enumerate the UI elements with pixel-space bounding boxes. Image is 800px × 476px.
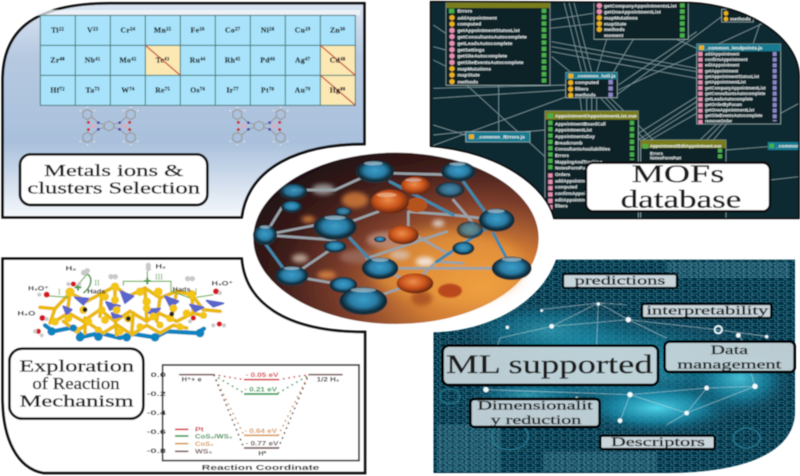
periodic table of metals: 74 — [129, 88, 135, 93]
periodic table of metals: Cd — [330, 55, 340, 64]
periodic table of metals: Re — [155, 85, 165, 94]
periodic table of metals: 45 — [235, 58, 241, 63]
y axis labels: -0.2 — [147, 391, 167, 398]
periodic table of metals: 75 — [165, 88, 170, 93]
database table: methods fragment — [722, 9, 753, 23]
database table: appointment list: ConsultantsAvailabilities — [555, 147, 611, 152]
energy value labels: - 0.77 eV — [246, 441, 278, 447]
database table: appointment list: Errors — [555, 153, 569, 158]
database table: edit appointment: NotesFormPart — [650, 155, 682, 160]
y axis labels: -0.6 — [147, 429, 167, 436]
database table: appointment settings: methods — [457, 79, 478, 85]
periodic table of metals: 48 — [340, 58, 346, 63]
label: exploration of reaction mechanism — [9, 349, 143, 419]
periodic table of metals: 78 — [269, 88, 275, 93]
database table: appointment settings: getLeadsAutocomplete — [457, 41, 513, 47]
database table: appointment settings — [446, 3, 550, 85]
periodic table of metals: Mo — [119, 55, 131, 64]
database table: common endpoints: getLeadsAutocomplete — [705, 96, 753, 101]
periodic table of metals: Pd — [260, 55, 270, 64]
chart legend: CoS₂/WS₂ — [195, 434, 233, 440]
panel: ML supported — [433, 258, 800, 475]
atom highlights — [260, 161, 522, 292]
database table: common fragment: _common — [775, 144, 800, 150]
periodic table of metals: Fe — [191, 25, 199, 34]
database table: common endpoints: getCompanyAppointmentList — [705, 85, 766, 90]
chart legend: WS₂ — [195, 450, 213, 456]
database table: appointment settings: getAppointmentStatusList — [457, 28, 520, 34]
database table: common endpoints: getAppointmentList — [705, 80, 746, 85]
label: MOFs database — [586, 160, 770, 213]
illustration: catalyst surface with hydrogen evolution steps: Hads — [173, 286, 191, 293]
periodic table of metals: 80 — [340, 88, 346, 93]
blurred background atoms — [292, 184, 444, 306]
periodic table of metals: Ta — [86, 85, 94, 94]
database table: appointment list: Orders — [555, 172, 571, 177]
database table: common endpoints: getAppointment — [705, 68, 739, 73]
periodic table of metals: 72 — [60, 88, 65, 93]
periodic table of metals: Cu — [295, 25, 305, 34]
periodic table of metals: 30 — [340, 28, 346, 33]
label: Dimensionality reduction: y reduction — [491, 413, 582, 427]
label: predictions: predictions — [575, 274, 665, 288]
y axis labels: 0.0 — [151, 372, 167, 379]
label: metals ions and clusters selection: Metals ions & — [44, 161, 183, 180]
periodic table of metals: Hg — [330, 85, 340, 94]
database table: common endpoints: getConsultantsAutocomplete — [705, 91, 766, 96]
database table: common endpoints: getOneAppointmentList — [705, 108, 755, 113]
database table: appointment list: MappingAndTracking — [555, 159, 602, 164]
label: Descriptors — [600, 435, 715, 449]
label: exploration of reaction mechanism: Mechanism — [20, 392, 134, 411]
periodic table of metals: 26 — [199, 28, 205, 33]
label: MOFs database: database — [621, 185, 741, 213]
database table: common util: methods — [575, 93, 596, 99]
periodic table of metals: Zr — [50, 55, 60, 64]
y axis labels — [147, 372, 167, 455]
database table: company appointments: moment — [604, 33, 624, 39]
illustration: catalyst surface with hydrogen evolution steps: H₂ — [155, 264, 166, 271]
label: metals ions and clusters selection — [20, 154, 207, 205]
energy value labels: 1/2 H₂ — [317, 377, 340, 383]
dotted energy pathways — [214, 375, 308, 448]
central illustration: MOF crystal structure — [249, 148, 543, 329]
database table: common endpoints: confirmAppointment — [705, 57, 748, 62]
periodic table of metals: 24 — [130, 28, 136, 33]
energy value labels: - 0.64 eV — [244, 429, 277, 435]
database table: appointment list: computed — [555, 185, 577, 190]
database table: common endpoints: getAppointmentStatusList — [705, 74, 760, 79]
database table: common endpoints: getOrderByParam — [705, 102, 742, 107]
database table: appointment settings: mapState — [457, 73, 480, 79]
database table: common endpoints: addAppointment — [705, 51, 740, 56]
label: metals ions and clusters selection: clusters Selection — [27, 179, 201, 198]
database table: common endpoints: editAppointment — [705, 63, 740, 68]
periodic table of metals: 25 — [166, 28, 172, 33]
panel: MOFs database — [430, 0, 800, 220]
illustration: catalyst surface with hydrogen evolution steps: H₃O⁺ — [28, 286, 49, 293]
label: exploration of reaction mechanism: Exploration — [19, 356, 135, 375]
periodic table of metals: Tc — [156, 55, 164, 64]
illustration: catalyst surface with hydrogen evolution steps: II — [94, 278, 100, 287]
label: Data management — [665, 342, 795, 372]
periodic table of metals: 47 — [305, 58, 311, 63]
database table: company appointments: mapMutations — [604, 15, 638, 21]
database table: appointment settings: getConsultantsAutocomplete — [457, 34, 527, 40]
periodic table of metals: Ni — [261, 25, 269, 34]
database table: common fragment — [768, 142, 800, 150]
illustration: catalyst surface with hydrogen evolution steps: III — [155, 272, 163, 281]
periodic table of metals: W — [121, 85, 129, 94]
periodic table of metals: 44 — [200, 58, 206, 63]
database table: edit appointment: Errors — [650, 151, 664, 156]
label: Data management: Data — [711, 343, 749, 357]
chart legend: Pt — [195, 428, 204, 434]
label: predictions — [563, 274, 677, 288]
periodic table of metals: Mn — [154, 25, 166, 34]
database table: common errors: _common_/Errors.js — [476, 135, 525, 141]
periodic table of metals: 23 — [93, 28, 99, 33]
database table: appointment settings: getSiteAutocomplete — [457, 54, 507, 60]
database table: common endpoints — [697, 44, 781, 124]
database table: methods fragment: methods — [730, 17, 751, 23]
periodic table of metals: 27 — [235, 28, 241, 33]
periodic table of metals: Ti — [51, 25, 59, 34]
blue linker atoms — [253, 160, 532, 315]
database table: edit appointment — [641, 140, 726, 220]
energy value labels: H* — [258, 452, 267, 458]
energy level lines — [179, 375, 343, 448]
icon: left metal complex molecule — [79, 106, 139, 146]
database table: appointment settings: getSiteEventsAutocomplete — [457, 60, 524, 66]
periodic table of metals: 76 — [200, 88, 205, 93]
illustration: catalyst surface with hydrogen evolution steps: Hads — [87, 288, 106, 295]
label: exploration of reaction mechanism: of Reaction — [32, 374, 120, 393]
illustration: catalyst surface with hydrogen evolution steps: H₃O⁺ — [212, 280, 234, 287]
periodic table of metals: Ru — [190, 55, 200, 64]
periodic table of metals: Au — [295, 85, 305, 94]
label: Data management: management — [677, 358, 782, 372]
database table: appointment list: editAppointment — [555, 197, 592, 202]
database table: appointment list: confirmAppointment — [555, 191, 601, 196]
periodic table of metals: Hf — [50, 85, 60, 94]
orange metal atoms — [371, 177, 462, 298]
database table: appointment list: AppointmentBoardCall — [555, 121, 606, 126]
database table: common util: _common_/util.js — [574, 74, 616, 80]
database table: common endpoints: _common_/endpoints.js — [704, 46, 763, 52]
panel: metal ions and clusters selection — [3, 3, 364, 217]
database table: edit appointment: Appointment/EditAppointment.vue — [650, 143, 722, 148]
label: interpretability — [642, 304, 771, 318]
periodic table of metals: Cr — [121, 25, 130, 34]
label: MOFs database: MOFs — [632, 160, 724, 188]
label: Descriptors: Descriptors — [611, 435, 705, 449]
periodic table of metals: Rh — [225, 55, 235, 64]
illustration: catalyst surface with hydrogen evolution steps: I — [195, 287, 198, 296]
periodic table of metals: Ir — [226, 85, 234, 94]
periodic table of metals: 22 — [59, 28, 65, 33]
chart legend — [175, 428, 233, 456]
energy value labels: H⁺+ e — [182, 376, 203, 383]
periodic table of metals: V — [87, 25, 93, 34]
chart: reaction free energy diagram — [147, 365, 359, 472]
database table: appointment list: Breadcrumb — [555, 140, 583, 145]
database table: company appointments: mapState — [604, 21, 627, 27]
label: Dimensionality reduction — [470, 398, 600, 427]
periodic table of metals: 73 — [94, 88, 100, 93]
database table: appointment list: addAppointment — [555, 178, 592, 183]
illustration: catalyst surface with hydrogen evolution steps: H₂ — [66, 266, 76, 273]
database table: appointment list — [545, 111, 638, 218]
periodic table of metals: Zn — [330, 25, 340, 34]
chart legend: CoS₂ — [195, 442, 214, 448]
energy value labels — [182, 373, 340, 458]
icon: right metal complex molecule — [229, 106, 289, 146]
y axis labels: -0.8 — [147, 448, 167, 455]
database table: appointment settings: getSettings — [457, 47, 485, 53]
label: ML supported — [443, 346, 658, 385]
database table: appointment list: AppointmentList — [555, 128, 592, 133]
periodic table of metals: 77 — [234, 88, 239, 93]
periodic table of metals: Pt — [261, 85, 269, 94]
bonds — [265, 172, 512, 301]
x axis title: Reaction Coordinate — [202, 465, 320, 472]
database table: company appointments — [594, 1, 688, 39]
database table: common util: computed — [575, 80, 599, 86]
database table: company appointments: methods — [604, 27, 625, 33]
database table: common util — [566, 72, 617, 99]
panel: exploration of reaction mechanism — [3, 259, 365, 473]
database table: company appointments: getOneAppointmentList — [604, 9, 661, 15]
database table: appointment list: filters — [555, 204, 568, 209]
periodic table of metals: 79 — [305, 88, 311, 93]
y axis labels: -0.4 — [147, 410, 167, 417]
database table: appointment settings: Errors — [457, 8, 473, 14]
database table: appointment list: Appointment/AppointmentList.vue — [555, 113, 637, 119]
periodic table of metals: 40 — [60, 58, 65, 63]
periodic table of metals: 29 — [305, 28, 311, 33]
periodic table of metals: 42 — [131, 58, 137, 63]
illustration: catalyst surface with hydrogen evolution steps: H₂O — [17, 310, 35, 317]
periodic table of metals: 41 — [95, 58, 101, 63]
label: ML supported: ML supported — [446, 350, 653, 379]
periodic table of metals: 28 — [269, 28, 275, 33]
database table: company appointments: getCompanyAppointmentsList — [604, 3, 677, 9]
database table: appointment list: AppointmentsDay — [555, 134, 595, 139]
periodic table of metals: 43 — [164, 58, 170, 63]
illustration: catalyst surface with hydrogen evolution steps — [17, 263, 234, 342]
periodic table of metals: Co — [225, 25, 235, 34]
database table: appointment settings: computed — [457, 22, 481, 28]
periodic table of metals: Ag — [295, 55, 305, 64]
periodic table of metals: Nb — [85, 55, 95, 64]
periodic table of metals — [40, 15, 355, 105]
database table: appointment settings: mapMutations — [457, 66, 491, 72]
database table: common util: filters — [575, 86, 589, 92]
illustration: catalyst surface with hydrogen evolution steps: I — [58, 288, 61, 297]
energy value labels: - 0.05 eV — [246, 373, 278, 379]
periodic table of metals: Os — [190, 85, 200, 94]
database table: common endpoints: removeOrder — [705, 119, 732, 124]
database table: appointment settings: addAppointment — [457, 15, 497, 21]
label: interpretability: interpretability — [646, 304, 769, 318]
database table: common endpoints: getSiteEventsAutocomplete — [705, 113, 763, 118]
energy value labels: - 0.21 eV — [244, 388, 277, 394]
label: Dimensionality reduction: Dimensionalit — [477, 398, 593, 412]
periodic table of metals: 46 — [270, 58, 275, 63]
database table: appointment list: NotesFormPart — [555, 166, 589, 171]
database table: common errors — [466, 132, 530, 142]
